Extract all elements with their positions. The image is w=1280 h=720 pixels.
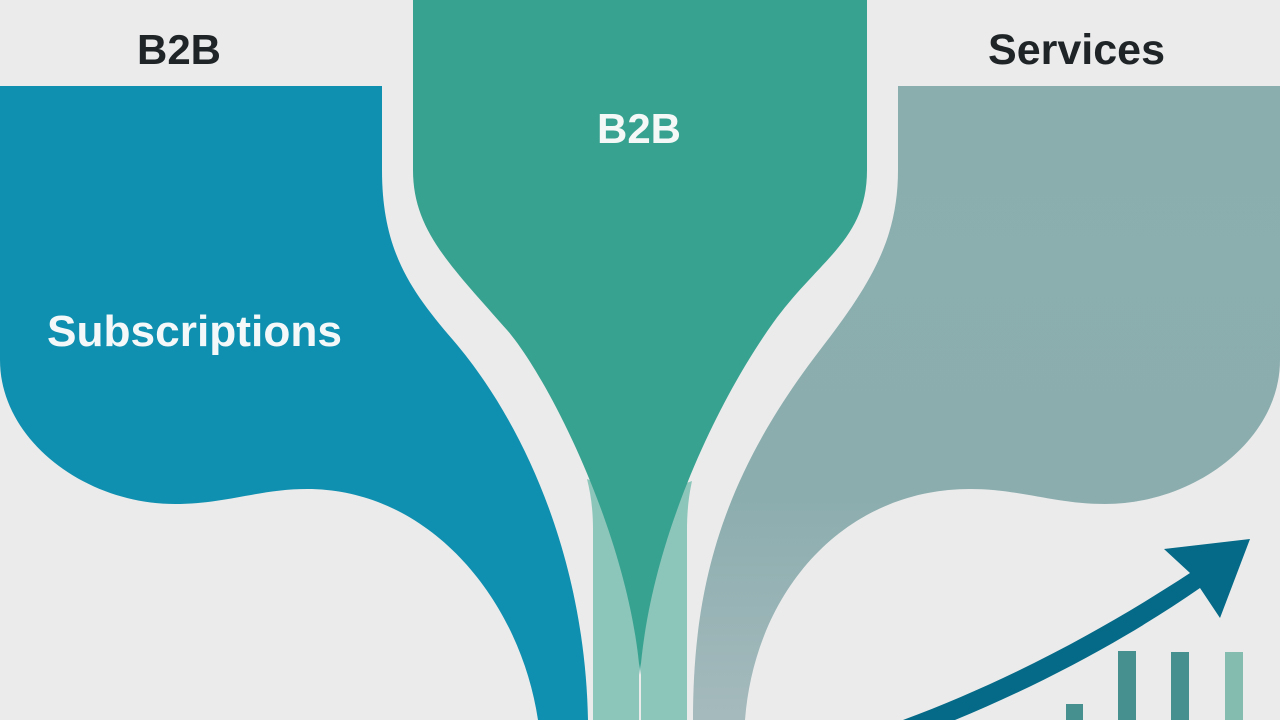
heading: B2B: B2B: [137, 26, 221, 73]
stream: light left channel: [587, 479, 640, 720]
label: subscriptions: Subscriptions: [47, 307, 342, 356]
label: centre B2B: B2B: [597, 105, 681, 152]
heading: services: Services: [988, 26, 1165, 74]
arrow: growth: [903, 539, 1250, 720]
stream: services: [693, 86, 1280, 720]
bar chart: [1066, 651, 1243, 720]
stream: light right channel: [640, 481, 692, 720]
